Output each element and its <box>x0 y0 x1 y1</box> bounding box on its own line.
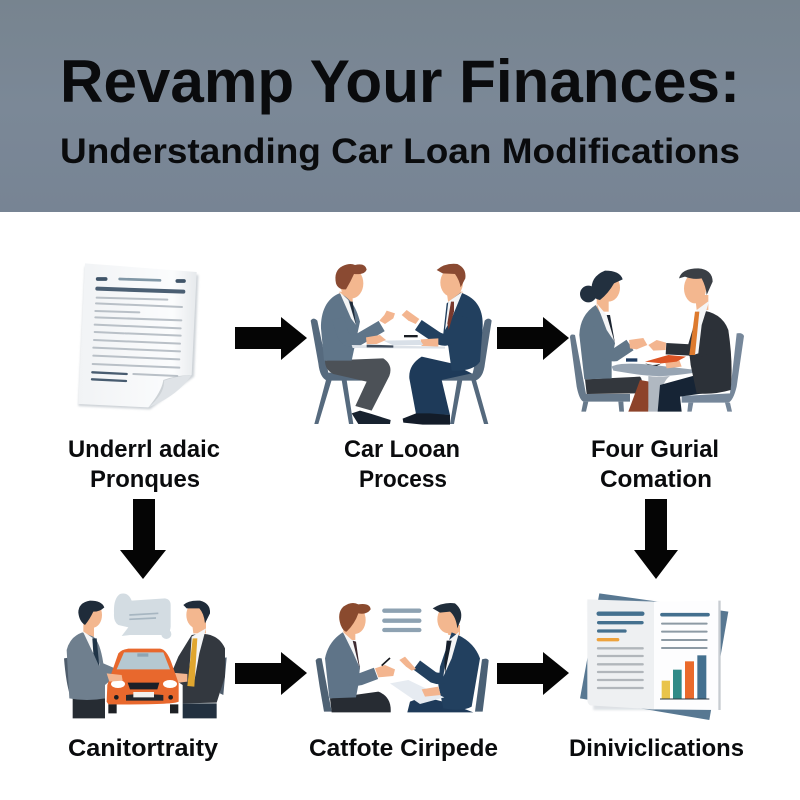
icon: two men with document and lines <box>316 603 489 712</box>
label: Car Looan Process: Car Looan <box>344 436 460 463</box>
right text lines <box>662 609 708 620</box>
table <box>352 345 445 349</box>
arrow: document to car loan process <box>235 317 307 360</box>
left man <box>330 692 391 712</box>
label: Underrl adaic Pronques <box>68 436 220 493</box>
left man <box>64 657 70 695</box>
papers <box>390 680 444 704</box>
label: Four Gurial Comation: Four Gurial <box>591 436 719 463</box>
table <box>612 364 697 376</box>
left text lines <box>598 614 708 688</box>
icon: two men with car and speech bubble <box>64 594 227 718</box>
arrow: down left <box>120 499 166 579</box>
speech bubble <box>114 594 171 636</box>
right man <box>409 357 472 415</box>
label: Catfote Ciripede: Catfote Ciripede <box>309 735 498 762</box>
icon: open report with bar chart <box>580 593 728 720</box>
woman <box>585 377 642 394</box>
left man <box>325 358 390 411</box>
label: Car Looan Process: Process <box>359 466 447 493</box>
right page <box>654 601 719 710</box>
label: Four Gurial Comation: Comation <box>600 466 712 493</box>
papers on table <box>645 355 686 363</box>
right chair <box>441 319 492 424</box>
man <box>658 374 703 412</box>
arrow: down right <box>634 499 678 579</box>
header banner <box>0 0 800 212</box>
chairs <box>570 335 630 402</box>
arrow: car loan process to four gurial comation <box>497 317 569 360</box>
list lines <box>384 611 419 630</box>
icon: woman and man shaking hands <box>570 268 744 412</box>
bar chart <box>662 681 670 699</box>
arrow: canitortraity to catfote ciripede <box>235 652 307 695</box>
label: Underrl adaic Pronques: Underrl adaic <box>68 436 220 463</box>
label: Four Gurial Comation <box>591 436 719 493</box>
label: Canitortraity: Canitortraity <box>68 735 219 762</box>
subtitle: Understanding Car Loan Modifications <box>60 132 740 171</box>
left chair <box>311 319 367 424</box>
label: Diniviclications: Diniviclications <box>569 735 744 762</box>
right man <box>407 697 473 712</box>
icon: document page <box>78 263 198 409</box>
title: Revamp Your Finances: <box>60 48 740 115</box>
chairs <box>316 658 332 712</box>
arrow: catfote ciripede to diniviclications <box>497 652 569 695</box>
car <box>107 649 179 704</box>
label: Underrl adaic Pronques: Pronques <box>90 466 200 493</box>
back pages <box>580 593 728 720</box>
right man <box>220 657 227 695</box>
icon: two men meeting at table <box>311 264 492 425</box>
label: Car Looan Process <box>344 436 460 493</box>
left page <box>587 599 654 709</box>
